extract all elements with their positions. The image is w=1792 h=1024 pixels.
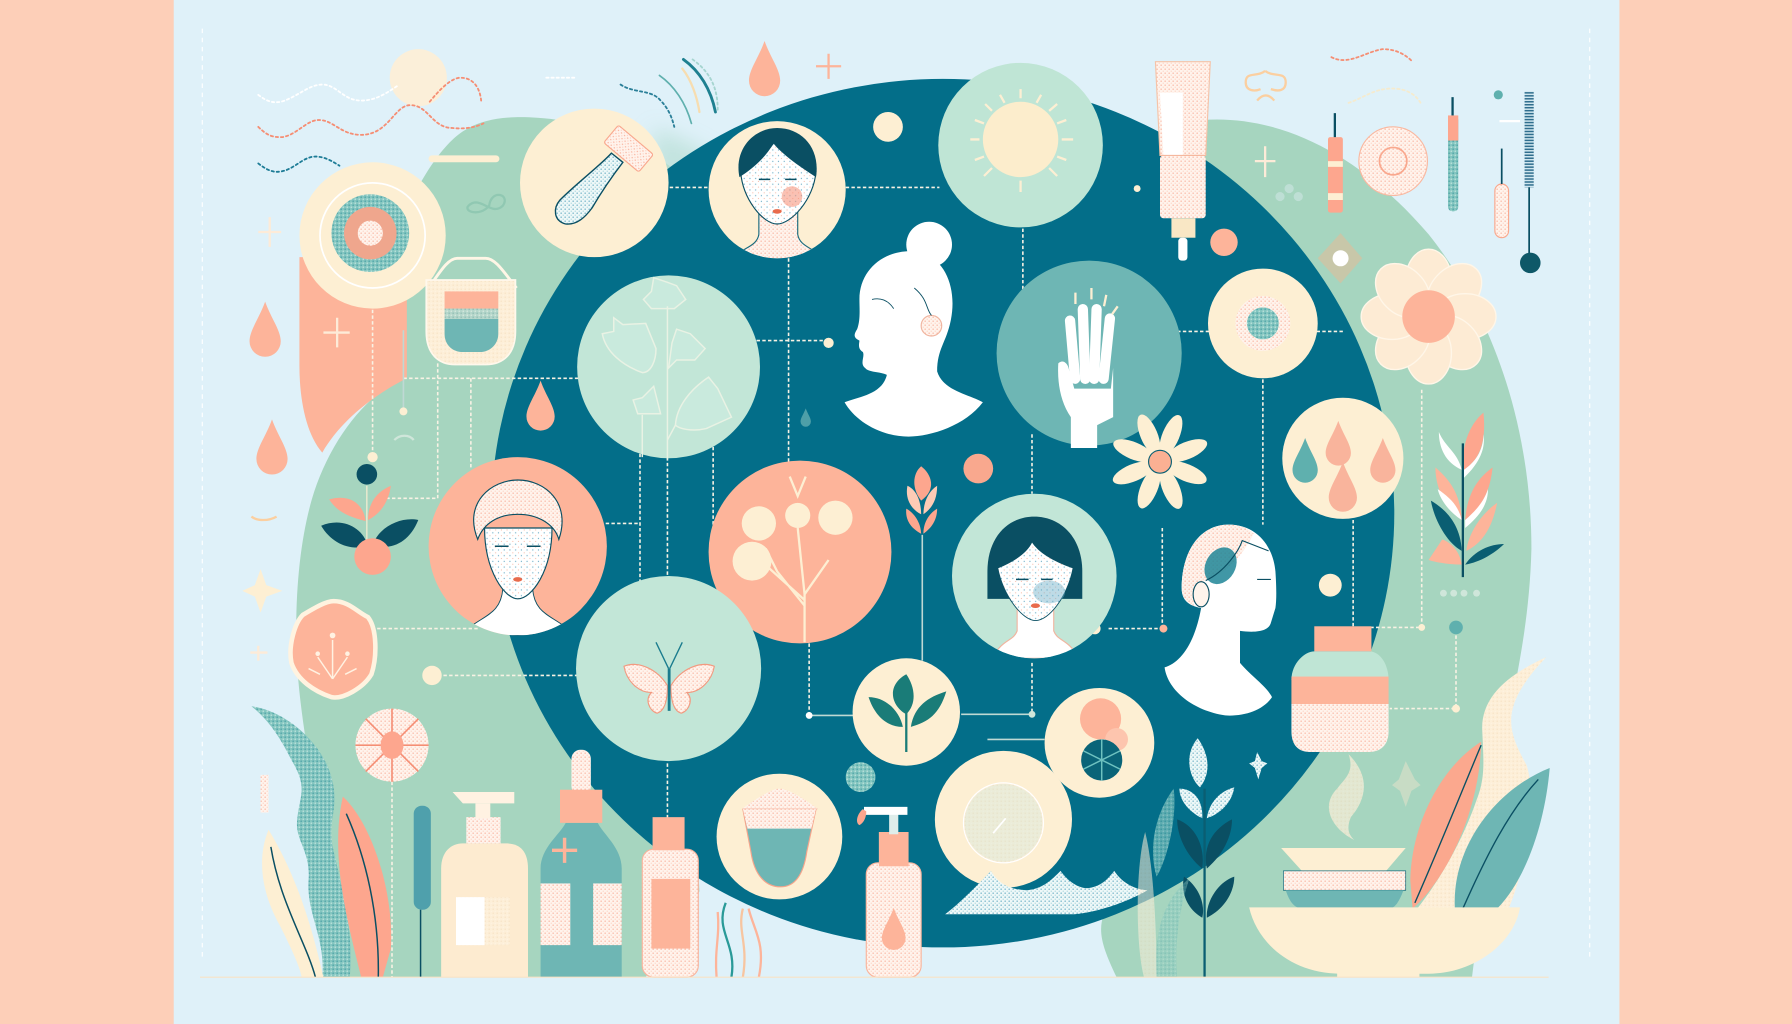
cream tube bbox=[1155, 62, 1210, 261]
connector lines bbox=[373, 187, 1456, 977]
large teal circle bbox=[491, 79, 1394, 947]
face portrait two with peach background bbox=[429, 457, 607, 635]
small star and steam bbox=[1249, 752, 1453, 840]
butterfly circle bbox=[576, 576, 761, 761]
leaf sprig bbox=[906, 466, 937, 534]
cup circle bbox=[717, 774, 842, 899]
plant circle bbox=[853, 658, 960, 766]
connector node dots bbox=[367, 112, 1463, 792]
striped feather leaf bbox=[1429, 413, 1504, 597]
face portrait one bbox=[709, 121, 846, 274]
daisy flower bbox=[1094, 396, 1226, 527]
round compact circle bbox=[935, 751, 1072, 888]
face portrait three on mint circle bbox=[952, 494, 1117, 658]
pump bottle bbox=[441, 792, 528, 977]
hand circle bbox=[997, 261, 1182, 448]
left plants bbox=[251, 706, 431, 977]
water drops and plus signs bbox=[250, 41, 1303, 661]
wheel circle bbox=[355, 709, 429, 782]
curved flourish lines bbox=[659, 59, 715, 123]
peach pump bottle bbox=[857, 807, 921, 977]
bowls and leaves bbox=[1249, 657, 1550, 977]
left small plant bbox=[242, 436, 418, 613]
cream target circle bbox=[1208, 269, 1318, 378]
right top beauty tools bbox=[1246, 71, 1541, 283]
target circle bbox=[299, 162, 446, 309]
pouch container bbox=[426, 258, 517, 365]
small bottle bbox=[642, 817, 698, 977]
citrus circle bbox=[1045, 688, 1154, 798]
left flower badge bbox=[291, 601, 375, 697]
dropper bottle bbox=[541, 750, 622, 977]
razor circle bbox=[520, 109, 669, 257]
white head profile bbox=[845, 222, 983, 437]
leaf circle bbox=[577, 275, 760, 459]
peach flower bbox=[1361, 249, 1496, 384]
wavy reeds bbox=[716, 903, 761, 977]
ground line bbox=[200, 976, 1549, 978]
green background blobs bbox=[296, 117, 1531, 977]
peach pill shape bbox=[299, 257, 407, 453]
bottom right herbs bbox=[1138, 738, 1234, 977]
wave shape bbox=[945, 871, 1147, 914]
sun circle bbox=[938, 63, 1103, 227]
right side band bbox=[1619, 0, 1792, 1024]
solid connector lines bbox=[403, 330, 1045, 739]
water drops circle bbox=[1282, 398, 1403, 519]
decorative wavy lines and pale sun bbox=[258, 49, 1421, 172]
bald head profile with teal mark bbox=[1165, 525, 1276, 716]
branch circle bbox=[709, 461, 891, 643]
left side band bbox=[0, 0, 174, 1024]
margin dashed guides bbox=[202, 29, 1590, 960]
jar bbox=[1291, 626, 1389, 752]
soft glow beside razor bbox=[651, 128, 726, 194]
